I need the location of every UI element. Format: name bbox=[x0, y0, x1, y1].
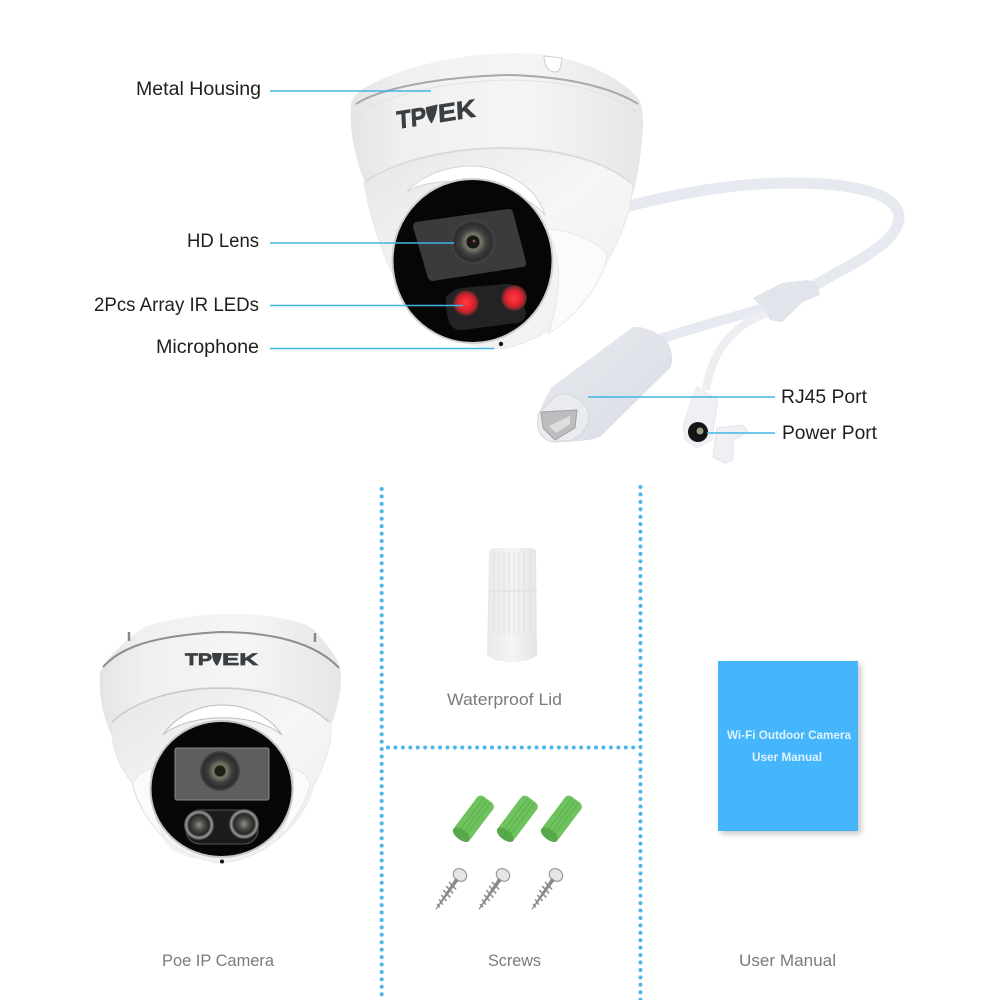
small lens window bbox=[175, 748, 269, 800]
label: microphone: Microphone bbox=[156, 337, 259, 358]
logo: TP bbox=[396, 102, 427, 135]
power connector bbox=[683, 387, 748, 463]
label: HD lens: HD Lens bbox=[187, 231, 259, 252]
label: metal housing: Metal Housing bbox=[136, 79, 261, 100]
package item: user manual: Wi-Fi Outdoor Camera bbox=[727, 730, 852, 742]
small lens surround bbox=[163, 705, 282, 735]
small LEDs bbox=[184, 809, 259, 840]
lens window bbox=[413, 209, 526, 281]
mounting notch bbox=[544, 56, 562, 72]
power branch cable bbox=[706, 312, 772, 390]
small ball bbox=[112, 687, 331, 863]
lens surround bbox=[407, 166, 545, 215]
label: power port: Power Port bbox=[782, 423, 878, 444]
main camera with cable bbox=[351, 53, 899, 463]
package item: waterproof lid bbox=[487, 548, 537, 662]
caption: Screws: Screws bbox=[488, 951, 541, 970]
package item: user manual: User Manual bbox=[752, 752, 822, 764]
small side flanges bbox=[133, 768, 165, 838]
caption: Poe IP Camera: Poe IP Camera bbox=[162, 951, 275, 970]
package item: user manual bbox=[718, 661, 861, 834]
small black face bbox=[150, 721, 292, 857]
small lens bbox=[200, 751, 240, 791]
housing groove bbox=[356, 75, 638, 104]
logo bbox=[396, 94, 476, 135]
black lens face bbox=[392, 179, 552, 343]
small microphone bbox=[220, 860, 224, 864]
package item: screws bbox=[430, 866, 565, 913]
label: RJ45 port: RJ45 Port bbox=[781, 387, 868, 408]
small LED bar bbox=[186, 810, 258, 844]
callout lines bbox=[270, 91, 775, 433]
side flange bbox=[546, 229, 607, 334]
dotted dividers bbox=[382, 487, 640, 1000]
small camera shell bbox=[100, 614, 341, 860]
caption: User Manual: User Manual bbox=[739, 951, 836, 970]
cable loop bbox=[622, 183, 899, 287]
small logo bbox=[185, 650, 259, 669]
logo: EK bbox=[437, 94, 476, 128]
caption: Waterproof Lid: Waterproof Lid bbox=[447, 690, 562, 709]
HD lens bbox=[451, 220, 495, 264]
package item: wall anchors bbox=[450, 794, 584, 845]
small mounting notches bbox=[129, 632, 315, 642]
lower ball bbox=[364, 147, 632, 349]
small logo: TP bbox=[185, 650, 212, 669]
callout labels bbox=[94, 79, 878, 444]
IR LEDs bbox=[453, 285, 527, 316]
RJ45 branch cable bbox=[660, 307, 768, 339]
small logo: EK bbox=[222, 650, 259, 669]
cable splitter bbox=[753, 280, 820, 322]
microphone hole bbox=[499, 342, 503, 346]
label: IR LEDs: 2Pcs Array IR LEDs bbox=[94, 295, 259, 316]
small housing groove bbox=[103, 632, 339, 668]
upper shell bbox=[351, 53, 643, 212]
RJ45 connector bbox=[538, 327, 672, 442]
package item: camera bbox=[100, 614, 341, 864]
IR LED bar bbox=[446, 284, 526, 330]
